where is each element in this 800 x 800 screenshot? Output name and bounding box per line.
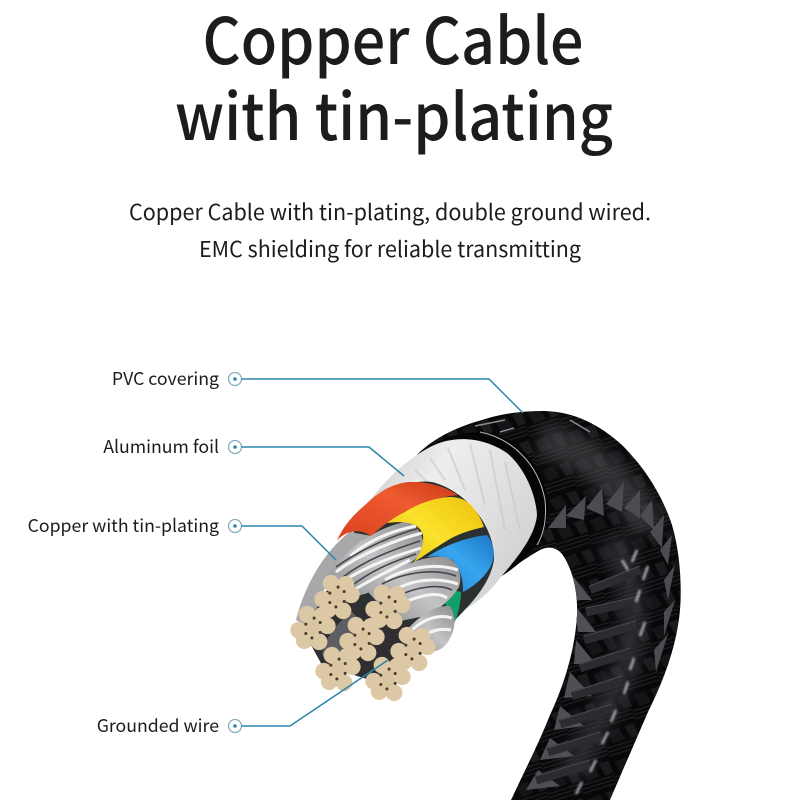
green core wire: [440, 591, 461, 632]
blue core wire: [427, 535, 494, 592]
aluminum foil: [362, 439, 537, 610]
silver bundle under blue: [368, 557, 460, 622]
subtitle text block: EMC shielding for reliable transmitting: [199, 232, 582, 264]
subtitle text block: [129, 195, 651, 264]
dark inner bundles: [300, 580, 420, 680]
silver outer strands: [296, 532, 372, 625]
inner cavity: [340, 482, 494, 655]
red core wire: [337, 482, 458, 541]
callout: Aluminum foil: Aluminum foil: [103, 433, 219, 459]
silver bundle under green: [405, 606, 454, 652]
rim highlight: [480, 432, 546, 545]
callout: Grounded wire: [97, 660, 388, 738]
callout: Copper with tin-plating: [28, 512, 336, 560]
silver bundle under yellow: [326, 521, 424, 597]
copper strand tips: [290, 575, 436, 701]
yellow core wire: [387, 497, 484, 563]
sheath front rim: [410, 432, 548, 577]
cable illustration: [290, 400, 700, 800]
callout: PVC covering: [112, 365, 523, 413]
title: [175, 0, 613, 159]
callout: Grounded wire: Grounded wire: [97, 712, 219, 738]
callout: PVC covering: PVC covering: [112, 365, 219, 391]
braided black sheath: [416, 411, 681, 800]
callout: Copper with tin-plating: Copper with tin-plating: [28, 512, 219, 538]
subtitle text block: Copper Cable with tin-plating, double ground wired.: [129, 195, 651, 227]
callout: Aluminum foil: [103, 433, 404, 476]
title: with tin-plating: [175, 67, 613, 159]
